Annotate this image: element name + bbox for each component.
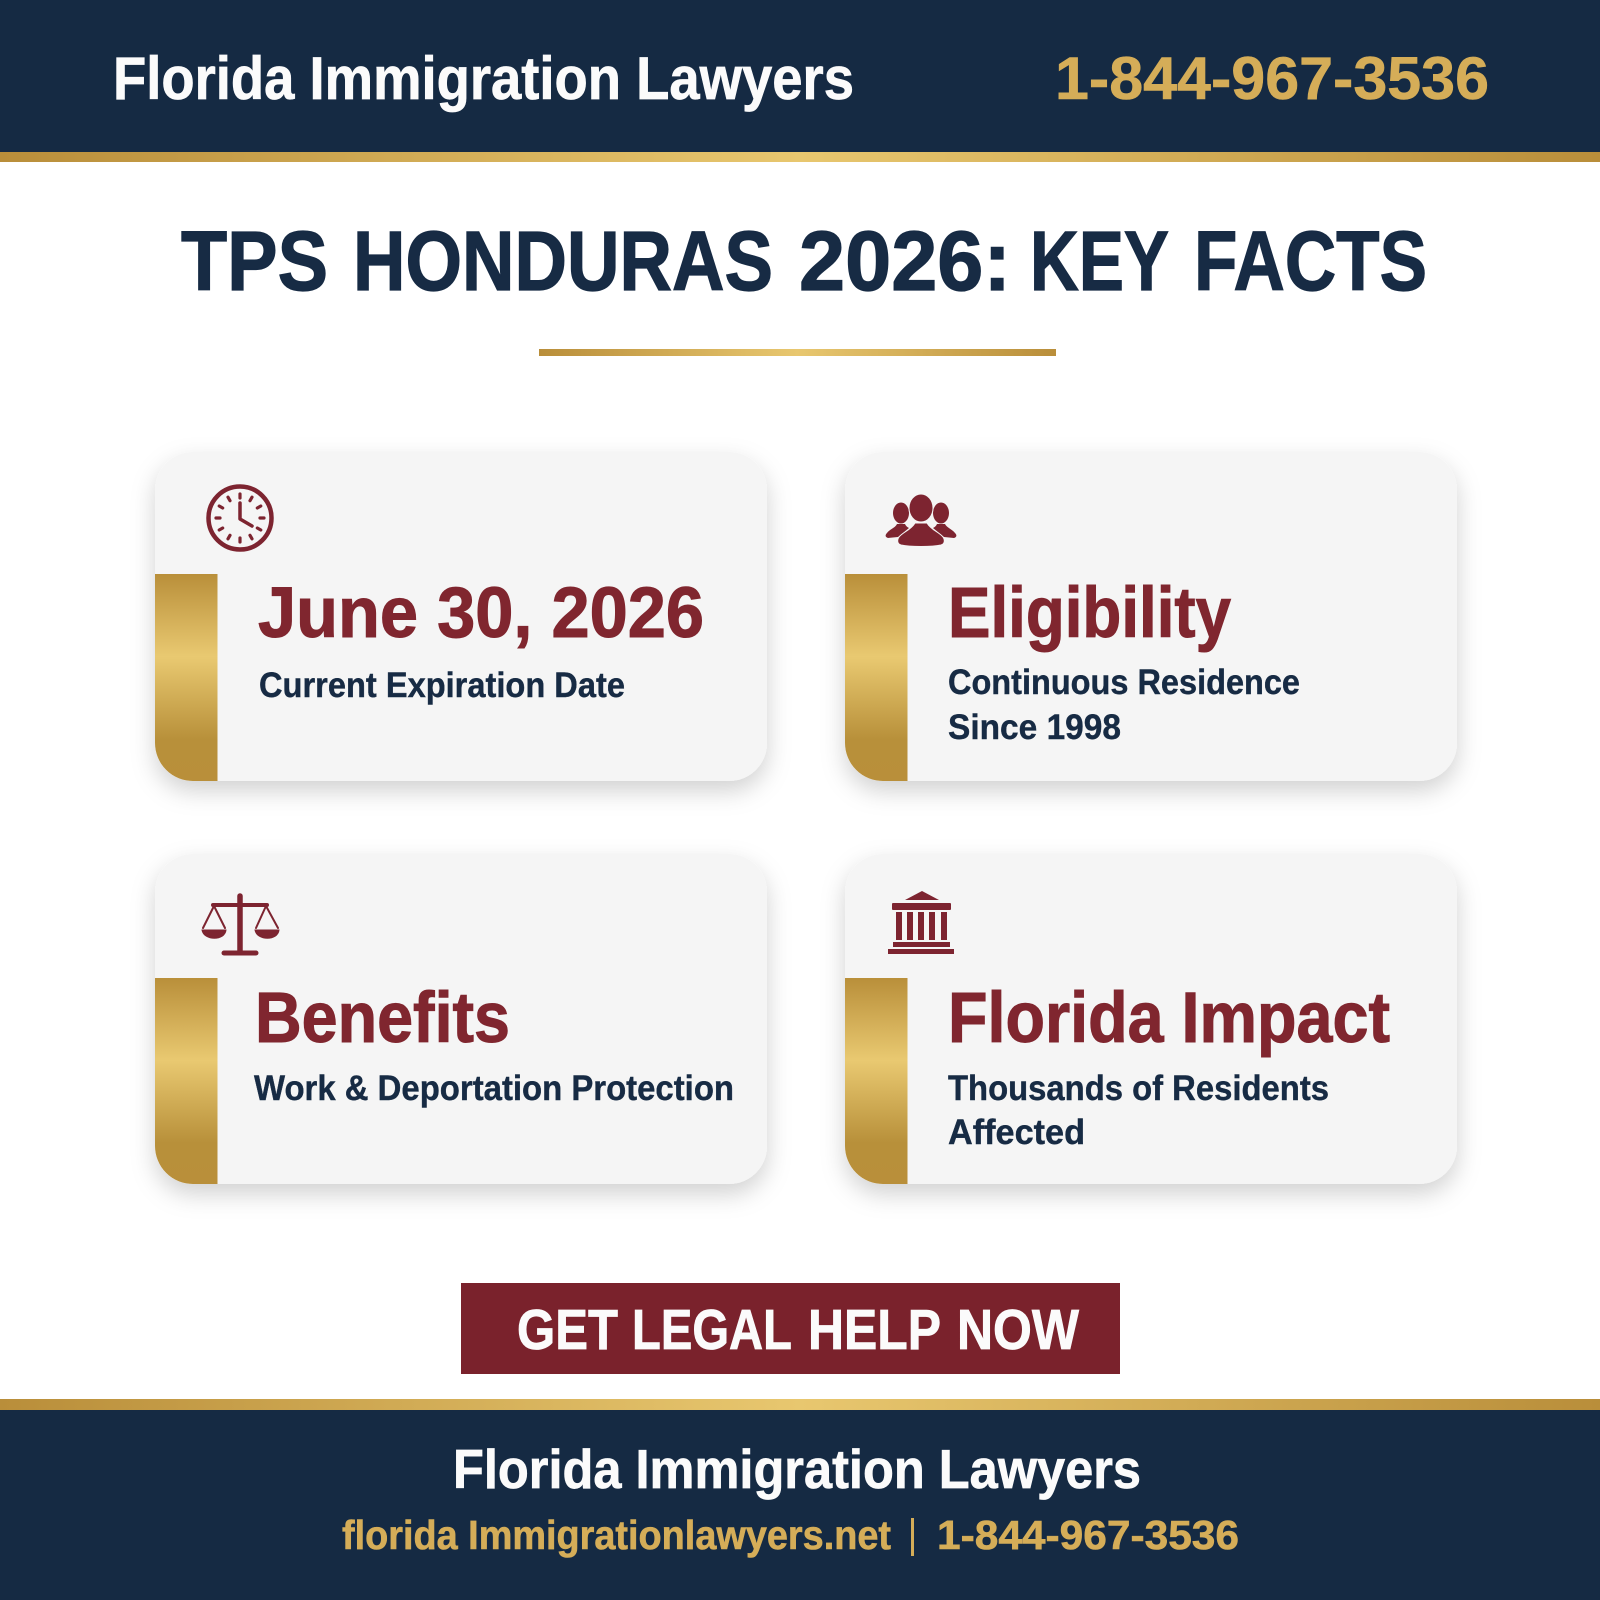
title divider bbox=[539, 349, 1056, 356]
header phone number: 1-844-967-3536 bbox=[1055, 45, 1489, 112]
panel: eligibility bbox=[845, 452, 1457, 781]
text: Current Expiration Date: Current Expiration Date bbox=[259, 666, 625, 705]
text: Thousands of Residents Affected: Thousands of Residents bbox=[948, 1069, 1329, 1108]
footer separator bbox=[911, 1518, 914, 1556]
icon: courthouse bbox=[888, 891, 954, 954]
panel: benefits bbox=[155, 854, 767, 1184]
text: Work & Deportation Protection: Work & Deportation Protection bbox=[254, 1069, 734, 1108]
main title: HONDURAS bbox=[353, 214, 773, 308]
text: Continuous Residence Since 1998 bbox=[948, 663, 1300, 747]
call to action button: LEGAL bbox=[632, 1298, 792, 1362]
heading: Eligibility: Eligibility bbox=[948, 574, 1231, 653]
header firm name: Florida Immigration Lawyers bbox=[113, 45, 854, 112]
call to action button bbox=[461, 1283, 1120, 1374]
heading: Florida Impact: Florida Impact bbox=[948, 979, 1390, 1058]
text: Thousands of Residents Affected bbox=[948, 1069, 1329, 1152]
text: Continuous Residence Since 1998: Continuous Residence bbox=[948, 663, 1300, 702]
footer website: florida Immigrationlawyers.net bbox=[342, 1512, 891, 1558]
top header band bbox=[0, 0, 1600, 162]
panel: expiration date bbox=[155, 452, 767, 781]
icon: scales of justice bbox=[202, 896, 279, 953]
icon: people bbox=[886, 494, 956, 546]
call to action button: GET bbox=[517, 1298, 618, 1362]
footer firm name: Florida Immigration Lawyers bbox=[453, 1438, 1141, 1500]
call to action button: HELP bbox=[808, 1298, 941, 1362]
footer band bbox=[0, 1399, 1600, 1600]
call to action button: NOW bbox=[957, 1298, 1079, 1362]
icon: clock bbox=[208, 486, 272, 550]
main title: 2026: bbox=[799, 214, 1011, 308]
main title: KEY bbox=[1030, 214, 1169, 308]
footer phone number: 1-844-967-3536 bbox=[937, 1512, 1239, 1558]
heading: June 30, 2026: June 30, 2026 bbox=[258, 574, 704, 653]
text: Thousands of Residents Affected: Affected bbox=[948, 1113, 1085, 1152]
heading: Benefits: Benefits bbox=[255, 979, 510, 1058]
main title: FACTS bbox=[1194, 214, 1427, 308]
panel: Florida impact bbox=[845, 854, 1457, 1184]
text: Continuous Residence Since 1998: Since 1998 bbox=[948, 708, 1121, 747]
main title: TPS bbox=[181, 214, 328, 308]
main title bbox=[181, 214, 1427, 308]
